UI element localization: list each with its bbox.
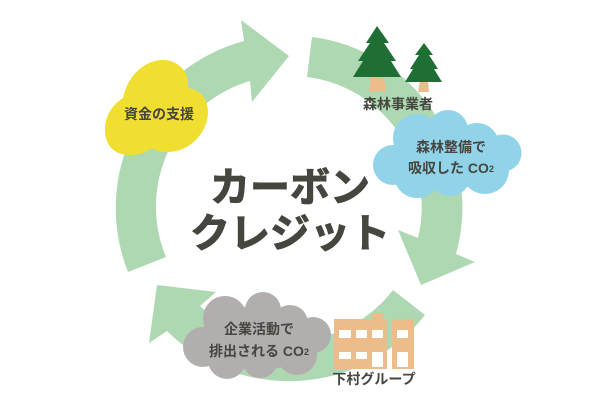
title: カーボン <box>210 166 370 210</box>
yellow cloud: funding support <box>105 60 208 155</box>
small tree <box>405 43 442 92</box>
large tree <box>353 26 401 92</box>
title: クレジット <box>190 212 390 256</box>
label: funding support: 資金の支援 <box>124 106 194 122</box>
arrow: right, forestry to absorption <box>307 37 475 285</box>
label: company activity: 企業活動で <box>224 321 294 337</box>
arrow: upper left, funding to forestry <box>116 20 289 272</box>
label: emitted CO2: 2 <box>304 347 309 357</box>
title <box>190 166 390 256</box>
grey cloud: CO2 from company activity <box>183 292 331 379</box>
icon: forest trees <box>353 26 442 92</box>
label: absorbed CO2: 2 <box>489 164 494 174</box>
label: emitted CO2: 排出される CO <box>209 343 304 359</box>
blue cloud: CO2 absorbed by forest management <box>373 110 522 198</box>
label: absorbed CO2: 吸収した CO <box>408 160 489 176</box>
arrow: bottom, company emissions <box>149 285 425 381</box>
label: forestry operators: 森林事業者 <box>363 96 433 112</box>
label: Shimomura Group: 下村グループ <box>332 371 416 387</box>
label: forest management: 森林整備で <box>416 139 486 155</box>
icon: company building <box>334 313 414 369</box>
